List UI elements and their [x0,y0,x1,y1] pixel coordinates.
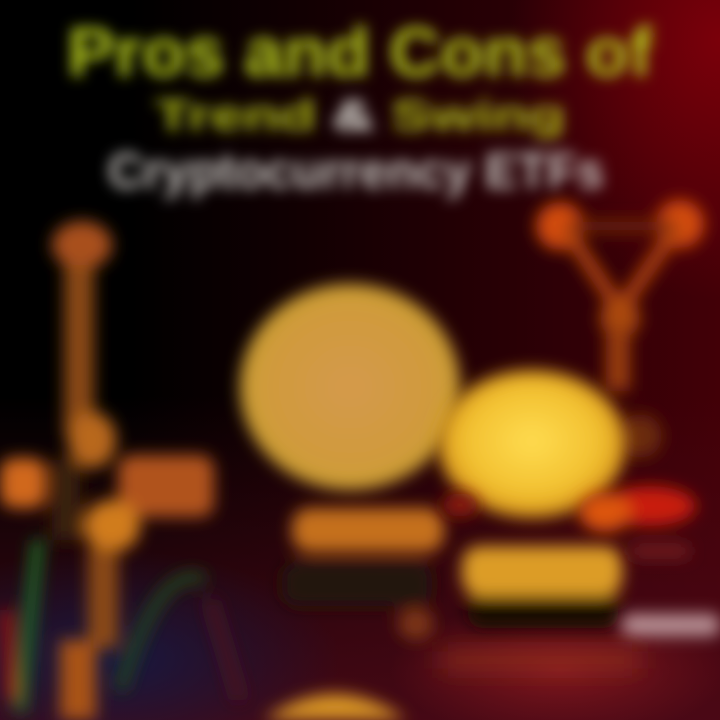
icon: top-right network symbol [536,200,704,458]
subtitle: Cryptocurrency ETFs [108,143,604,199]
icon: large gold coin [240,284,460,490]
reflections on floor [440,650,640,670]
title [68,13,653,199]
icon: glowing gold coin [438,370,626,518]
icon: left coin stack [282,508,444,640]
title line 2: Trend & Swing [155,91,565,140]
icon: right coin stack [462,546,622,628]
title line 1: Pros and Cons of [68,13,653,91]
icon: left candlestick chart [0,221,240,720]
icon: bottom coin [264,694,406,720]
red glow accents [442,486,720,636]
